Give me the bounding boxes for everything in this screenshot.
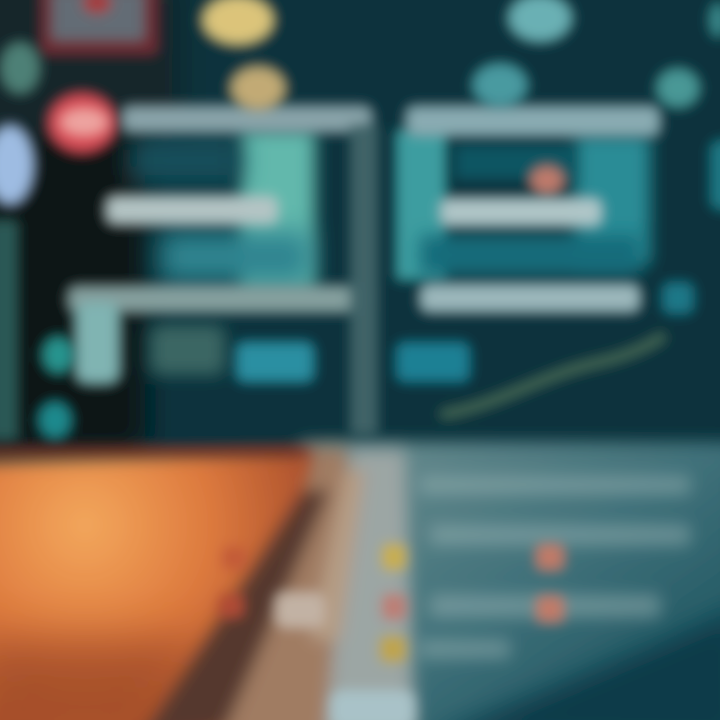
panel: right screen center dark fill	[455, 145, 575, 180]
icon: teal dot lower	[38, 401, 72, 439]
floor: right teal surface	[300, 442, 720, 720]
panel: left screen teal column	[240, 130, 315, 290]
icon: teal light far right	[656, 68, 700, 108]
icon: red light	[48, 93, 116, 153]
button: left teal	[236, 342, 314, 382]
left green stripe	[0, 220, 18, 440]
background: dark teal wall	[0, 0, 720, 450]
right edge teal glow	[710, 140, 720, 210]
panel: left screen upper fill	[130, 138, 240, 183]
floor: left orange surface	[0, 450, 320, 720]
panel: left screen blue fill	[160, 232, 310, 282]
text block: right row 3	[420, 284, 640, 312]
icon: teal dot upper	[42, 336, 74, 374]
icon: left green light	[0, 42, 40, 94]
icon: top teal light	[508, 0, 572, 42]
panel: right screen right teal column	[575, 135, 650, 265]
panel: right screen lower fill	[420, 235, 640, 275]
icon: red accent	[529, 165, 565, 195]
button: right teal	[396, 342, 470, 382]
text block: right row 2	[440, 198, 602, 226]
floor: dark red top edge of orange surface	[0, 447, 310, 457]
icon: teal glow at top right	[709, 2, 720, 38]
floor: streaks on the right	[420, 476, 690, 658]
panel: right screen left teal column	[396, 130, 446, 280]
icon: red light core	[60, 108, 108, 136]
text block: right row 1	[406, 106, 660, 136]
line: olive curve	[440, 335, 665, 415]
divider: center column	[350, 125, 378, 435]
floor: dark lower-right corner	[430, 610, 720, 720]
floor: dark orange lower area	[0, 640, 200, 720]
background: dark top left corner	[0, 0, 180, 130]
block: left lower grey	[150, 325, 225, 375]
text block: left row 2	[106, 196, 278, 224]
panel: right screen	[396, 106, 694, 415]
background: dark left edge	[0, 120, 145, 450]
text block: left row 3	[68, 286, 368, 312]
floor markers: colored dots	[218, 544, 564, 720]
panel: left screen	[68, 106, 372, 382]
icon: teal light above right panel	[472, 63, 528, 107]
icon: pale teal block	[75, 302, 120, 384]
icon: blue light	[0, 125, 34, 205]
icon: top red square frame	[40, 0, 158, 55]
floor: central road strip	[140, 448, 415, 720]
block: right side teal	[662, 282, 694, 314]
icon: second yellow light	[230, 66, 286, 110]
icon: top yellow light	[202, 0, 274, 45]
text block: left row 1	[122, 106, 372, 132]
